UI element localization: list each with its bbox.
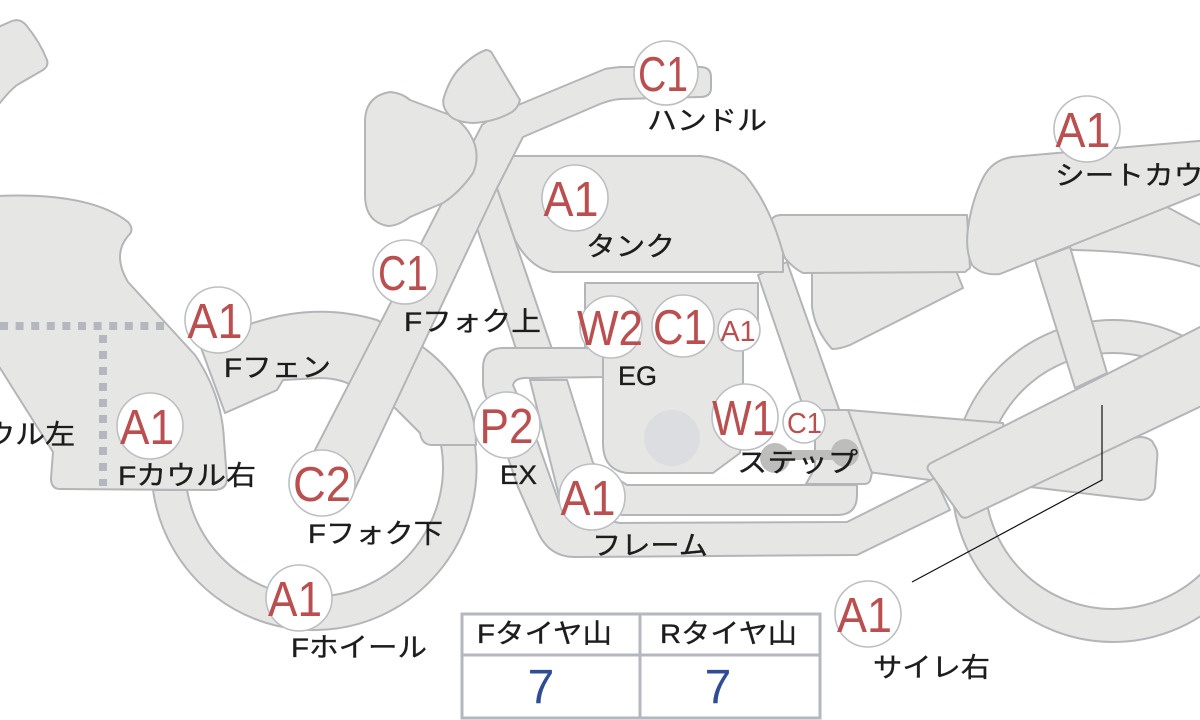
badge: A1 front cowl right: A1 [120, 401, 174, 455]
part: meter [443, 50, 520, 123]
badge: W2 engine: W2 [577, 302, 643, 356]
label: fender: Fフェン [224, 353, 331, 383]
badge: A1 frame: A1 [560, 472, 616, 526]
table: tire tread depth [462, 614, 820, 718]
label: tank: タンク [586, 232, 675, 262]
label: step: ステップ [737, 448, 858, 478]
cowl split line horizontal [0, 322, 166, 330]
badge: A1 engine small [718, 309, 760, 351]
label: front wheel: Fホイール [291, 633, 427, 663]
part: rear wheel [952, 320, 1200, 642]
badge: C2 fork lower: C2 [293, 458, 351, 512]
badge: C1 engine: C1 [653, 301, 707, 355]
label: fork lower: Fフォク下 [308, 519, 443, 549]
part: lower frame tube [530, 380, 857, 515]
badge: C1 fork upper: C1 [378, 247, 428, 301]
table frame [462, 614, 820, 718]
badge: A1 front wheel: A1 [268, 573, 322, 627]
badge: W1 step: W1 [712, 392, 775, 446]
part: engine [585, 283, 758, 473]
badge: A1 tank: A1 [544, 173, 598, 227]
part: exhaust pipe and bottom frame [483, 348, 950, 557]
label: exhaust: EX [500, 460, 537, 490]
table header: rear tire: Rタイヤ山 [660, 619, 797, 649]
leader line: muffler [912, 405, 1102, 582]
step peg left [760, 443, 790, 473]
table value: front tire: 7 [528, 661, 554, 714]
badge: A1 seat cowl: A1 [1056, 104, 1110, 158]
part: front cowl [0, 196, 227, 490]
part: upper frame down tube [477, 188, 553, 352]
part: muffler [928, 322, 1200, 518]
part: front fender [200, 312, 476, 445]
part: handlebar and front fork [315, 67, 711, 493]
step peg right [831, 439, 859, 467]
part: exhaust end piece [1000, 437, 1157, 500]
part: seat cowl [967, 140, 1200, 274]
part: headlight [365, 92, 477, 226]
badge: C1 handlebar: C1 [638, 48, 688, 102]
part: rear fender [1055, 207, 1200, 270]
badge: A1 muffler: A1 [837, 589, 892, 643]
part: side piece [812, 268, 963, 349]
part: mirror [0, 20, 48, 108]
label: handlebar: ハンドル [647, 106, 767, 136]
part: rear frame strut [758, 262, 840, 412]
part: rear shock [1035, 247, 1107, 388]
part: step plate [806, 410, 872, 484]
part: step bar [760, 439, 859, 473]
badge: C1 step small: C1 [787, 408, 822, 440]
part: side cover [771, 215, 970, 273]
label: fork upper: Fフォク上 [404, 307, 541, 337]
label: front cowl right: Fカウル右 [118, 461, 256, 491]
label: engine: EG [618, 361, 657, 391]
cowl split line vertical [99, 335, 107, 486]
table value: rear tire: 7 [705, 661, 731, 714]
part: engine cover [644, 410, 700, 466]
part: tank [497, 156, 783, 272]
part: swing arm [848, 410, 1010, 480]
label: muffler right: サイレ右 [873, 653, 990, 683]
table header: front tire: Fタイヤ山 [477, 619, 612, 649]
badge: A1 fender: A1 [188, 295, 242, 349]
step bar link [775, 450, 845, 460]
badge: A1 engine small: A1 [720, 316, 756, 348]
label: frame: フレーム [592, 531, 708, 561]
part: front wheel [153, 445, 477, 630]
badge: C1 step small [783, 401, 825, 443]
badge: P2 exhaust: P2 [480, 400, 534, 454]
